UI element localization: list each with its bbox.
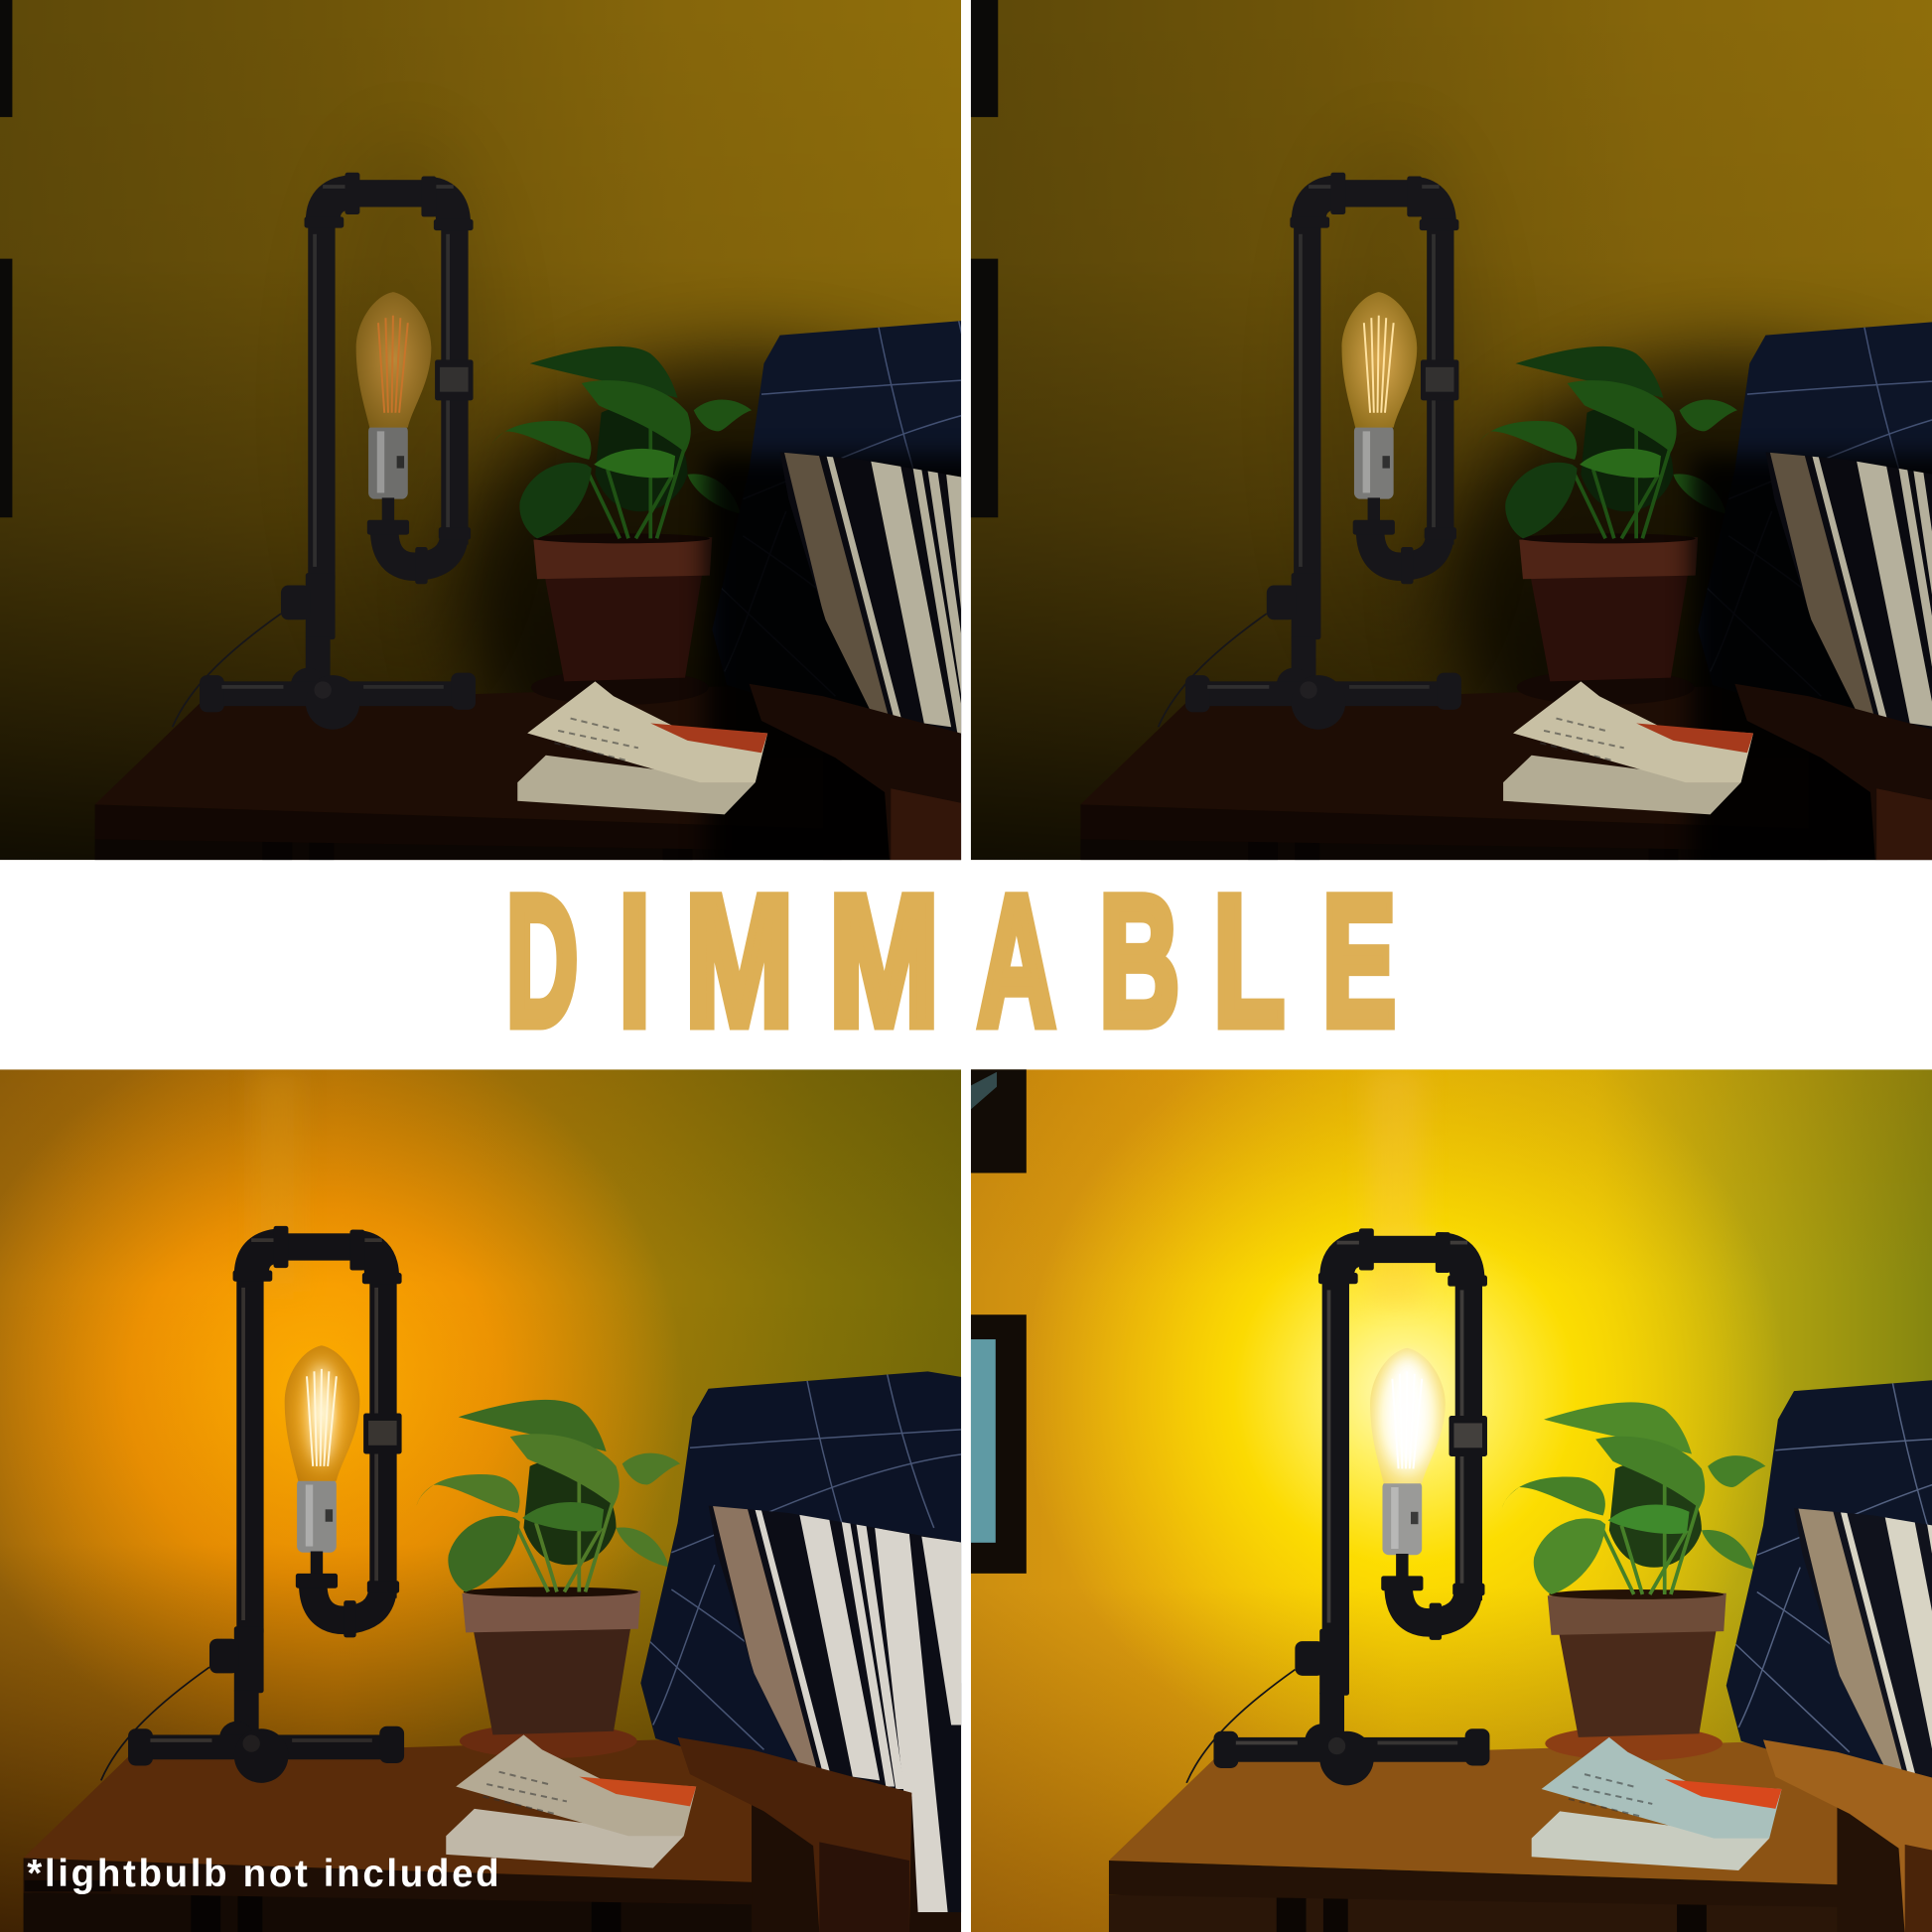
- lightbulb, faint glow: [1342, 292, 1417, 428]
- picture frames: [962, 1026, 1027, 1574]
- potted plant: [1502, 1402, 1765, 1594]
- plant pot: [460, 1587, 640, 1758]
- title: DIMMABLE: M: [829, 858, 939, 1064]
- side table: [1080, 693, 1827, 860]
- striped pillow: [780, 453, 961, 737]
- striped pillow: [1765, 450, 1932, 869]
- wall background: [961, 0, 1932, 860]
- footnote shadow: [25, 1880, 111, 1891]
- wall background: [0, 1069, 961, 1932]
- wooden armrest: [1763, 1739, 1932, 1932]
- title: DIMMABLE: B: [1099, 858, 1179, 1064]
- potted plant: [1473, 346, 1737, 538]
- picture frames: [0, 0, 12, 517]
- title: DIMMABLE: I: [620, 858, 650, 1064]
- book: [517, 681, 767, 814]
- plaid blanket: [640, 1371, 965, 1773]
- panel: lamp low, top right: [934, 0, 1932, 894]
- potted plant: [487, 346, 752, 538]
- wooden armrest: [678, 1737, 911, 1932]
- wall background: [971, 1069, 1932, 1932]
- striped pillow: [1794, 1506, 1932, 1925]
- panel: lamp off, top left: [0, 0, 961, 860]
- plant pot: [1545, 1589, 1726, 1760]
- striped pillow: [709, 1503, 966, 1922]
- pipe lamp: [101, 1226, 404, 1783]
- chair body: [640, 1683, 964, 1932]
- chair shadow: [1692, 456, 1932, 881]
- lightbulb, barely lit: [356, 292, 431, 428]
- plaid blanket: [713, 321, 961, 697]
- scene objects: [934, 0, 1932, 894]
- book: [446, 1734, 696, 1867]
- title: DIMMABLE: M: [685, 858, 793, 1064]
- side table: [1109, 1739, 1856, 1932]
- scene objects: [0, 0, 1051, 894]
- wall background: [0, 0, 1047, 860]
- book: [1532, 1737, 1782, 1870]
- plant pot: [1517, 533, 1698, 705]
- plaid blanket: [1698, 318, 1932, 720]
- pipe lamp: [1159, 173, 1461, 730]
- chair shadow: [691, 439, 961, 860]
- panel: lamp full brightness, bottom right: [962, 1026, 1932, 1932]
- chair body: [1698, 629, 1932, 879]
- book: [1503, 681, 1753, 814]
- wooden armrest: [1734, 684, 1932, 879]
- title band: [0, 860, 1932, 1069]
- title: DIMMABLE: L: [1213, 858, 1285, 1064]
- title: DIMMABLE: A: [978, 858, 1055, 1064]
- side table: [24, 1737, 770, 1932]
- title: DIMMABLE: E: [1322, 858, 1396, 1064]
- pipe lamp: [1186, 1228, 1489, 1785]
- plant pot: [531, 533, 712, 705]
- chair body: [1726, 1686, 1932, 1932]
- title: DIMMABLE: D: [506, 858, 578, 1064]
- chair body: [823, 629, 961, 860]
- pipe lamp: [173, 173, 476, 730]
- wooden armrest: [749, 684, 961, 860]
- lightbulb, full glow: [1370, 1348, 1446, 1483]
- lightbulb, amber glow: [285, 1345, 359, 1481]
- footnote: lightbulb not included: *lightbulb not included: [27, 1853, 499, 1895]
- picture frames: [971, 0, 999, 518]
- plaid blanket: [1726, 1374, 1932, 1775]
- side table: [95, 693, 842, 860]
- potted plant: [416, 1400, 680, 1591]
- panel: lamp medium, bottom left: [0, 1069, 966, 1932]
- scene objects: [962, 1026, 1932, 1932]
